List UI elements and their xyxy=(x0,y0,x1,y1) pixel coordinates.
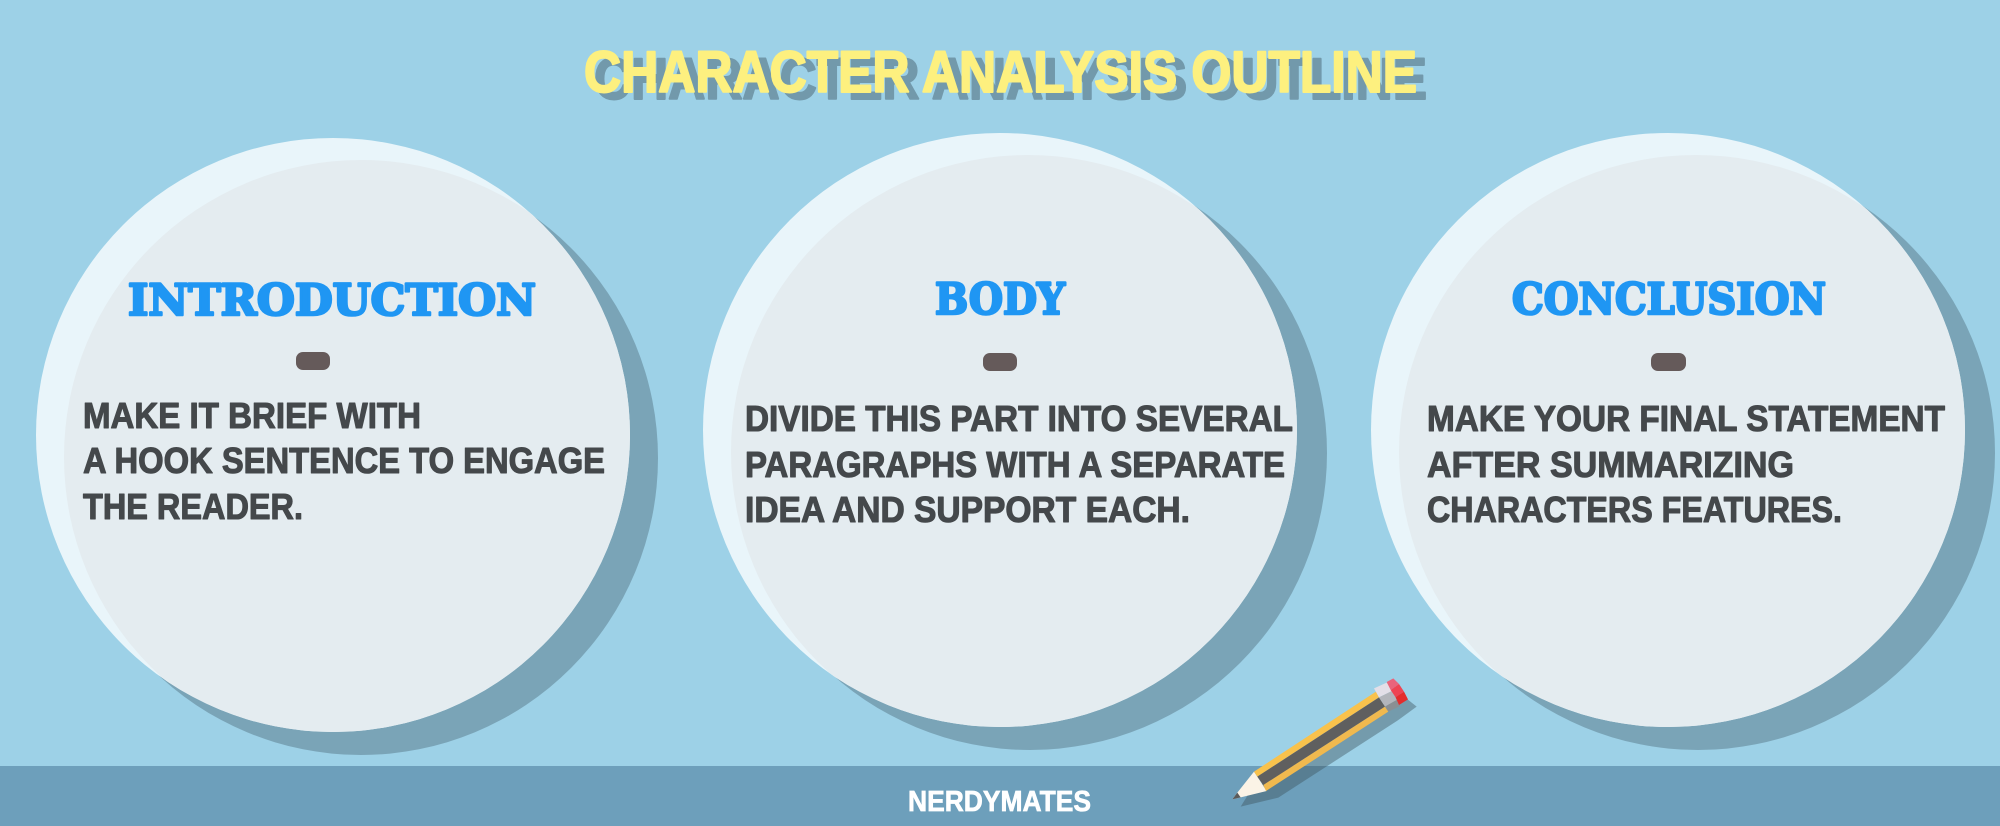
text block: introduction: THE READER. xyxy=(83,486,303,527)
text block: introduction xyxy=(83,395,605,527)
text block: conclusion: MAKE YOUR FINAL STATEMENT xyxy=(1427,398,1945,439)
circle disc with shadow xyxy=(1371,133,1995,750)
text block: introduction: MAKE IT BRIEF WITH xyxy=(83,395,421,436)
title: CHARACTER ANALYSIS OUTLINE xyxy=(584,40,1417,105)
text block: conclusion xyxy=(1427,398,1945,530)
footer brand text: NERDYMATES xyxy=(908,786,1091,818)
panel: introduction xyxy=(36,138,658,755)
text block: body: IDEA AND SUPPORT EACH. xyxy=(745,489,1190,530)
text block: body: PARAGRAPHS WITH A SEPARATE xyxy=(745,444,1285,485)
circle disc with shadow xyxy=(703,133,1327,750)
dash xyxy=(983,353,1017,371)
heading: body: BODY xyxy=(935,275,1066,325)
panel: conclusion xyxy=(1371,133,1995,750)
text block: body: DIVIDE THIS PART INTO SEVERAL xyxy=(745,398,1293,439)
text block: conclusion: CHARACTERS FEATURES. xyxy=(1427,489,1842,530)
text block: conclusion: AFTER SUMMARIZING xyxy=(1427,444,1794,485)
heading: conclusion: CONCLUSION xyxy=(1512,275,1826,325)
heading: introduction: INTRODUCTION xyxy=(128,276,536,326)
dash xyxy=(296,352,330,370)
title: CHARACTER ANALYSIS OUTLINE xyxy=(594,47,1427,112)
panel: body xyxy=(703,133,1327,750)
icon: pencil xyxy=(1232,678,1417,807)
footer band xyxy=(0,766,2000,826)
circle disc with shadow xyxy=(36,138,658,755)
text block: body xyxy=(745,398,1293,530)
text block: introduction: A HOOK SENTENCE TO ENGAGE xyxy=(83,440,605,481)
dash xyxy=(1651,353,1686,371)
